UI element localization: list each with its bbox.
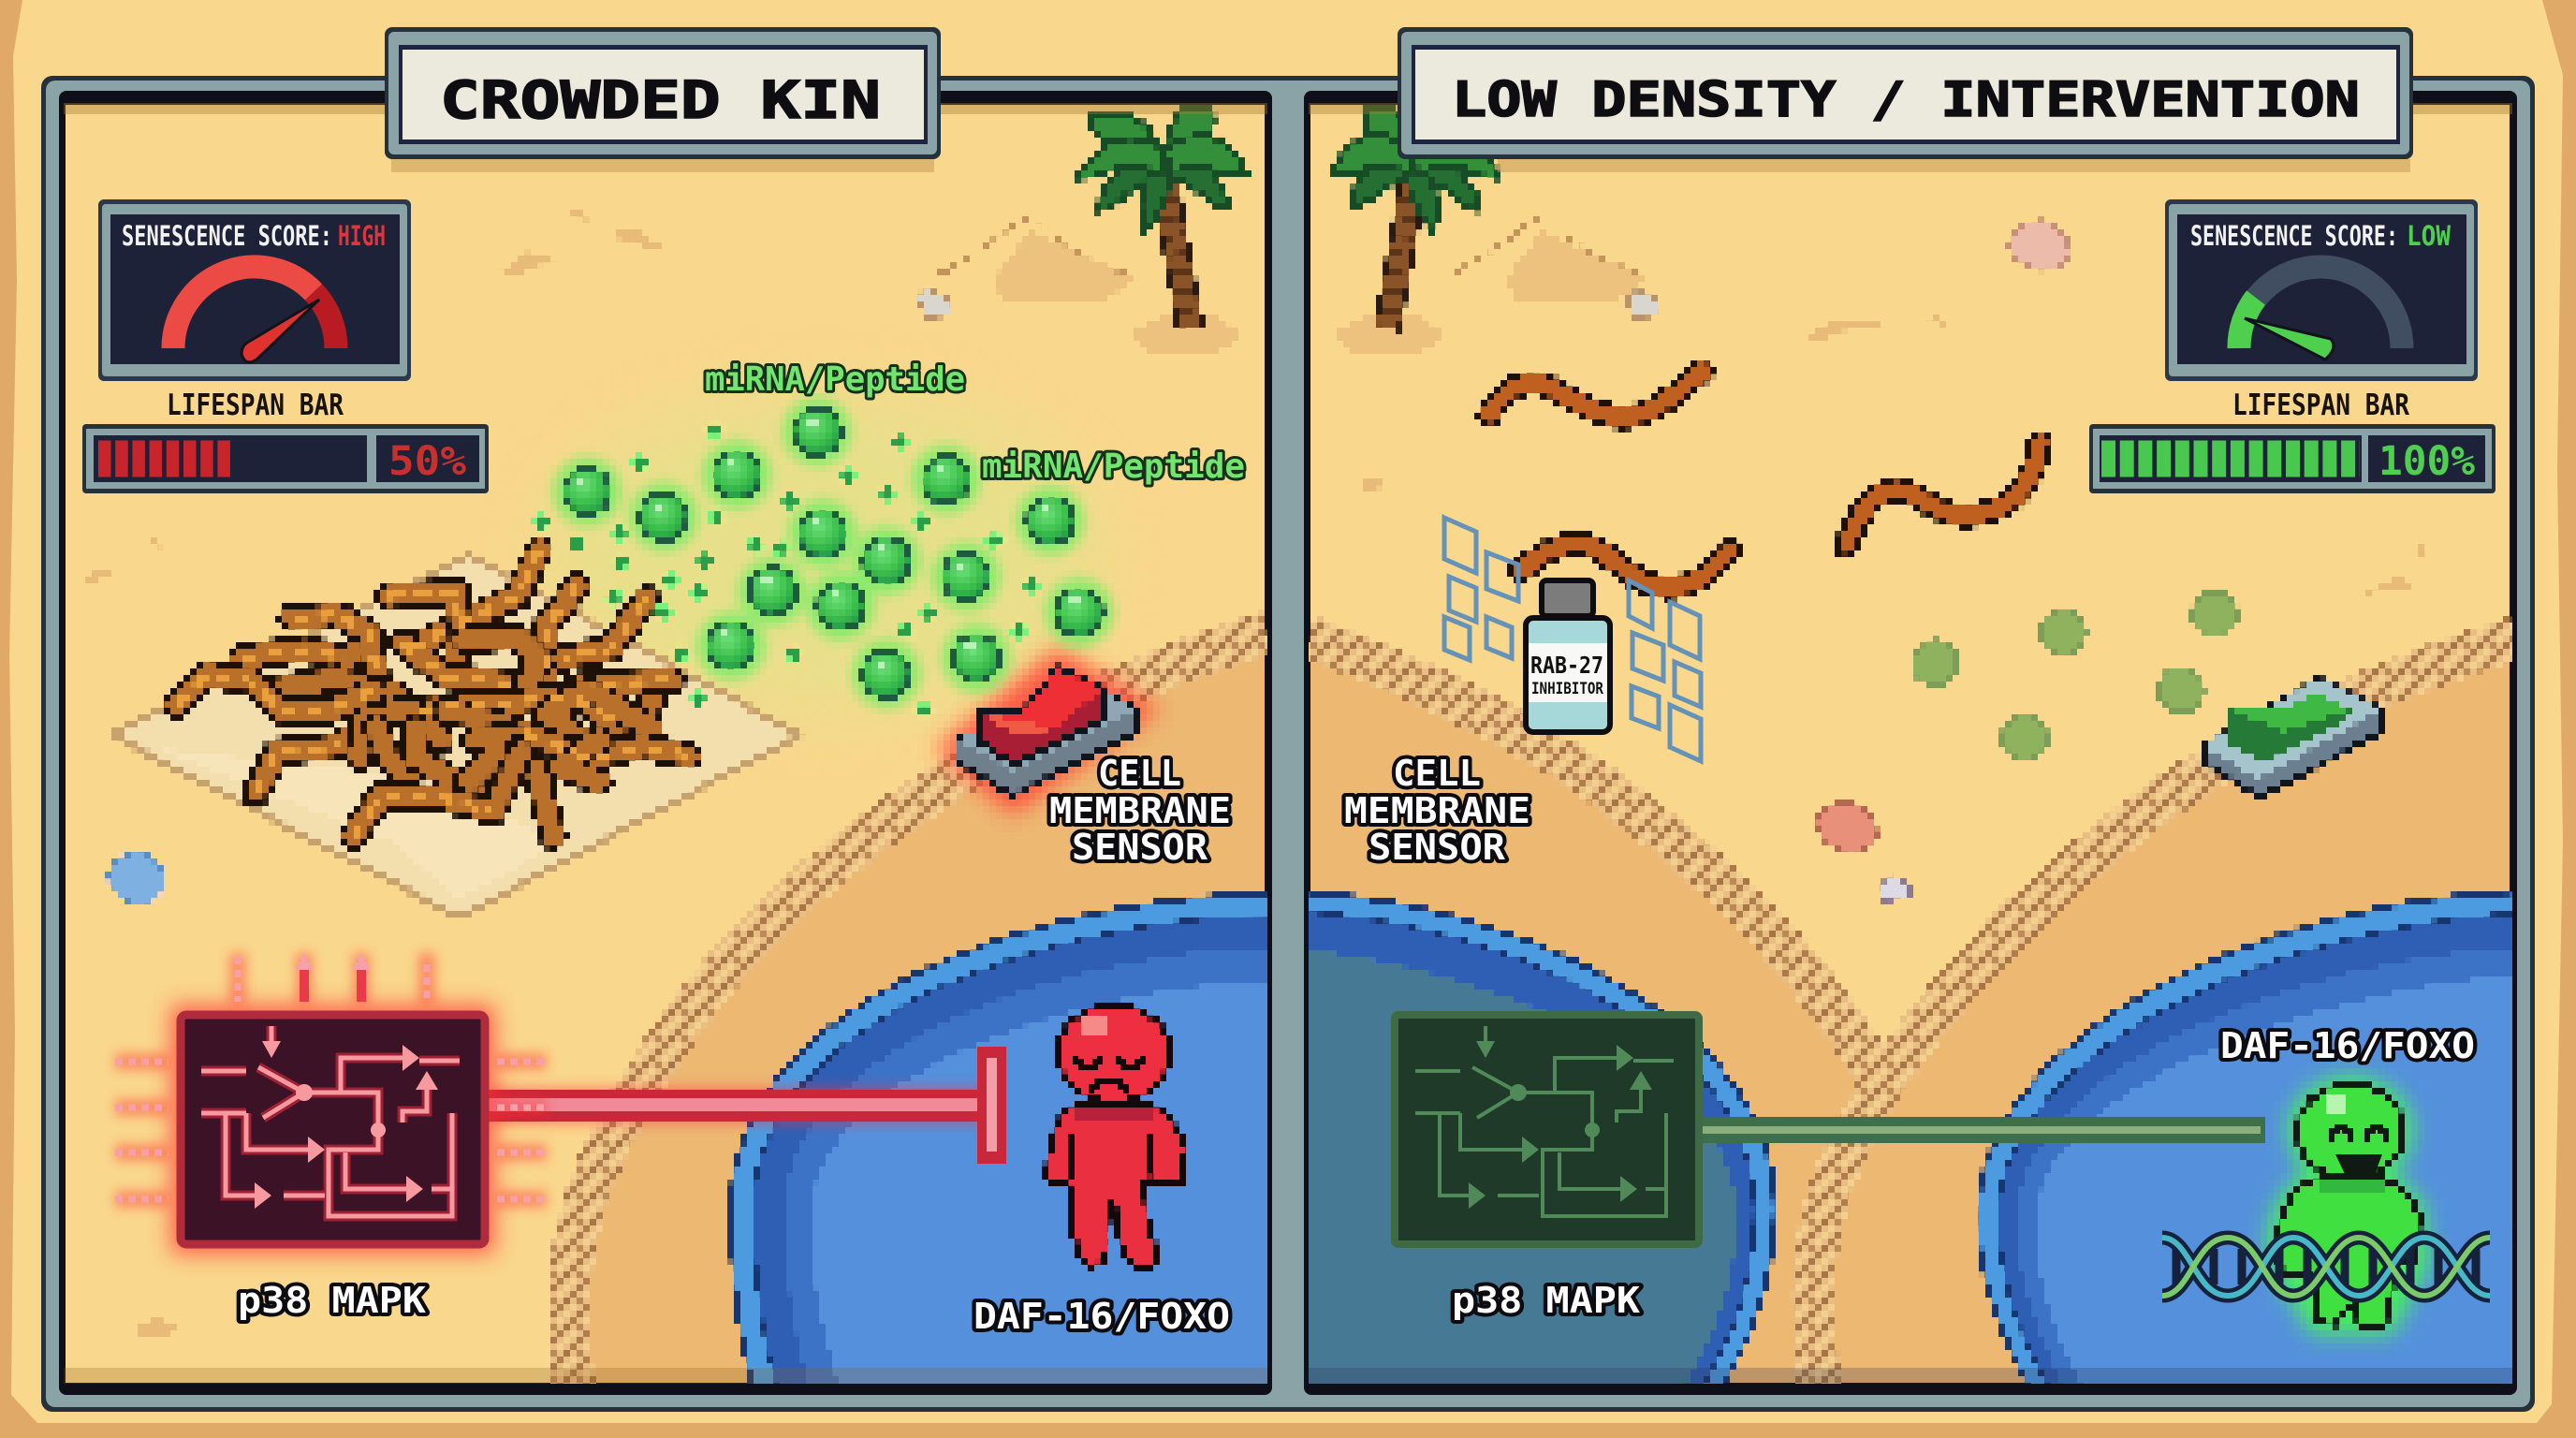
panel: low density intervention <box>1301 103 2518 1395</box>
label: lifespan bar: LIFESPAN BAR <box>2232 389 2409 422</box>
cell interior sand <box>590 655 1265 1383</box>
red switch glow <box>945 655 1148 807</box>
top shadow <box>1309 103 2512 114</box>
sand dune <box>929 221 1137 304</box>
membrane band <box>569 632 1267 1395</box>
label: p38 MAPK: p38 MAPK <box>1452 1280 1640 1321</box>
bottom shadow <box>64 1368 1267 1384</box>
outside sand <box>64 103 1267 1384</box>
label: DAF-16/FOXO: DAF-16/FOXO <box>2220 1025 2475 1066</box>
outside sand <box>1309 103 2512 1086</box>
worm 3 <box>1521 544 1730 588</box>
shell: blue <box>108 854 165 903</box>
lifespan bar 100%: 100% <box>2378 438 2475 485</box>
red DAF-16 figure body <box>1046 1005 1186 1269</box>
label: cell membrane sensor <box>1049 753 1231 868</box>
label: cell membrane sensor: MEMBRANE <box>1344 790 1530 831</box>
red sensor switch <box>957 668 1135 796</box>
label: miRNA/Peptide right: miRNA/Peptide <box>982 448 1245 486</box>
membrane bands <box>1309 637 2518 1395</box>
top shadow <box>64 103 1267 114</box>
gauge panel: senescence high: HIGH <box>338 220 386 252</box>
gauge panel: senescence low: SENESCENCE SCORE: <box>2190 220 2398 252</box>
sand tufts <box>79 208 668 1339</box>
cell interior sand <box>1309 103 2512 1384</box>
label: p38 MAPK: p38 MAPK <box>238 1280 426 1321</box>
label: cell membrane sensor: SENSOR <box>1072 827 1208 868</box>
rab-27 inhibitor vial: RAB-27 <box>1530 652 1603 679</box>
lifespan bar 50% <box>82 424 489 493</box>
lifespan bar 100% <box>2089 424 2496 493</box>
worm pile <box>177 550 689 836</box>
title plate: crowded kin <box>385 27 941 172</box>
nucleus <box>731 894 1273 1395</box>
desert and cell scene <box>64 103 1273 1395</box>
green haze <box>543 393 1105 712</box>
gauge panel: senescence high: SENESCENCE SCORE: <box>122 220 332 252</box>
worm 1 <box>1489 371 1703 418</box>
green DAF-16 figure body <box>2267 1077 2429 1334</box>
green sensor switch <box>2203 679 2380 798</box>
palm tree <box>1331 107 1501 352</box>
label: cell membrane sensor <box>1344 753 1530 868</box>
sand dune <box>1441 221 1649 304</box>
lifespan bar 50%: 50% <box>388 438 466 485</box>
title plate: crowded kin: CROWDED KIN <box>440 70 881 130</box>
label: cell membrane sensor: CELL <box>1098 753 1181 794</box>
left nucleus muted <box>1301 892 1775 1395</box>
green signal spheres <box>552 397 1114 709</box>
gauge panel: senescence low: LOW <box>2407 220 2451 252</box>
rab-27 inhibitor vial: INHIBITOR <box>1531 680 1604 698</box>
palm tree <box>1076 107 1247 352</box>
gauge panel: senescence low <box>2165 199 2478 381</box>
bottom shadow <box>1309 1368 2512 1384</box>
desert and cell scene <box>1301 103 2518 1395</box>
label: cell membrane sensor: MEMBRANE <box>1049 790 1231 831</box>
p38 MAPK chip dim <box>1395 1015 1699 1244</box>
title plate: low density <box>1398 27 2413 172</box>
panel: crowded kin <box>64 103 1273 1395</box>
DNA helix <box>2162 1238 2490 1296</box>
inhibition arrow <box>489 1047 1006 1164</box>
rab-27 inhibitor vial <box>1526 580 1610 732</box>
title plate: low density: LOW DENSITY / INTERVENTION <box>1452 72 2360 128</box>
label: DAF-16/FOXO: DAF-16/FOXO <box>973 1296 1230 1337</box>
pebbles and shells <box>1626 221 2071 901</box>
label: cell membrane sensor: SENSOR <box>1368 827 1505 868</box>
pebble <box>917 288 951 318</box>
small green dots <box>533 421 1041 719</box>
label: miRNA/Peptide upper: miRNA/Peptide <box>705 360 965 399</box>
label: cell membrane sensor: CELL <box>1393 753 1481 794</box>
sand tufts <box>1357 316 2428 594</box>
right nucleus <box>1978 892 2518 1395</box>
rab-27 shield panels <box>1444 518 1701 761</box>
worm 2 <box>1847 443 2040 546</box>
sand platform <box>111 555 800 917</box>
faded signal spheres <box>1912 592 2237 760</box>
gauge panel: senescence high <box>98 199 411 381</box>
red figure face <box>1076 1056 1143 1093</box>
p38 MAPK chip red <box>115 953 547 1254</box>
label: lifespan bar: LIFESPAN BAR <box>167 389 344 422</box>
signal rays <box>115 953 547 1199</box>
inactive pathway bar <box>1701 1117 2265 1143</box>
green figure face <box>2332 1127 2386 1174</box>
